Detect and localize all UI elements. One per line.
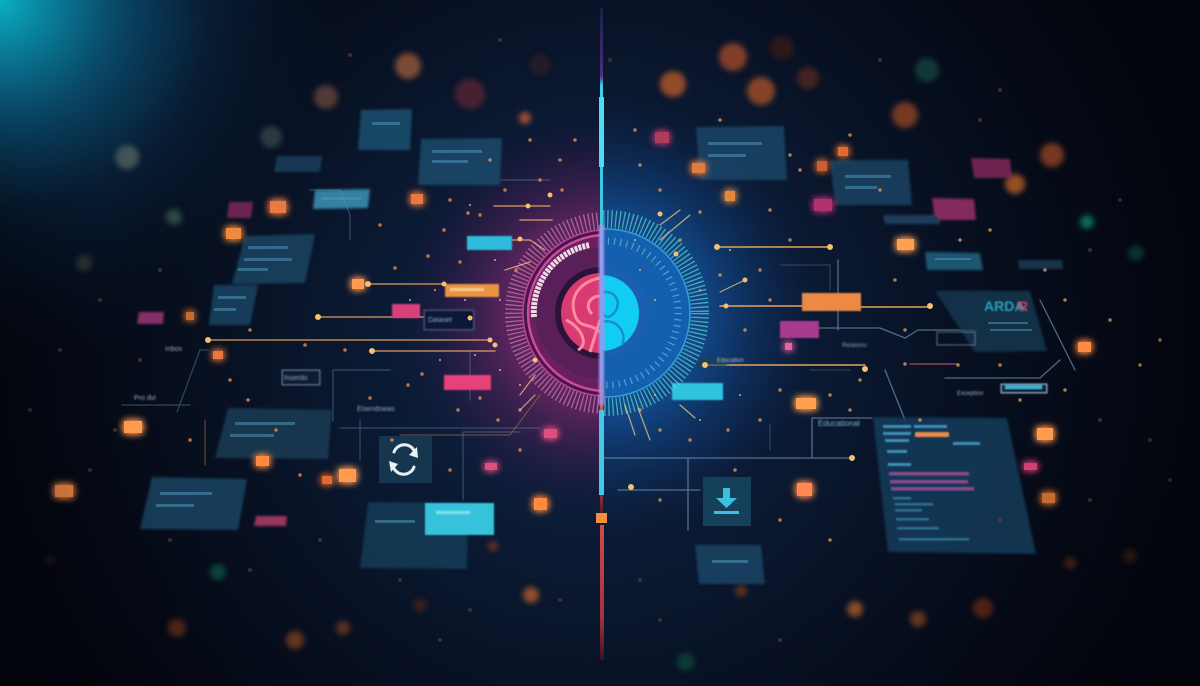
panel: sync card with refresh icon: [379, 436, 432, 483]
panels: right side: [695, 126, 1063, 584]
corner teal glow: [0, 0, 260, 260]
small text labels: left side: Inserdo: [284, 375, 307, 382]
small text labels: left side: Pro dvi: [134, 395, 156, 402]
panels: left side: [137, 109, 502, 569]
highlighted labels: right side: [672, 293, 1047, 400]
small text labels: left side: mbox: [165, 346, 183, 353]
core emblem: pink half: [505, 212, 600, 414]
circuit traces: [122, 180, 1075, 530]
central spine: [596, 8, 607, 660]
small text labels: right side: Relations: [842, 343, 867, 349]
small text labels: right side: R: [1018, 298, 1028, 314]
highlighted labels: left side: [282, 236, 512, 535]
small text labels: right side: [717, 298, 1028, 428]
traces: right side: [602, 247, 1075, 530]
small text labels: right side: Educational: [818, 419, 860, 428]
small text labels: left side: Dataset: [428, 317, 452, 324]
small text labels: right side: ARDA: [984, 298, 1024, 314]
small text labels: right side: Exception: [957, 391, 983, 397]
panel: download card with arrow icon: [703, 477, 751, 526]
document panel lines: [883, 425, 980, 540]
small text labels: left side: Eisendowas: [357, 406, 395, 413]
small text labels: left side: [134, 317, 452, 413]
core emblem: blue half: [603, 210, 709, 416]
traces: left side: [122, 180, 552, 500]
trace endpoints: [208, 195, 930, 487]
panel text strokes: right side: [708, 142, 1032, 563]
small text labels: right side: Education: [717, 358, 744, 364]
panel text strokes: left side: [156, 122, 482, 523]
glowing nodes: [55, 132, 1091, 510]
